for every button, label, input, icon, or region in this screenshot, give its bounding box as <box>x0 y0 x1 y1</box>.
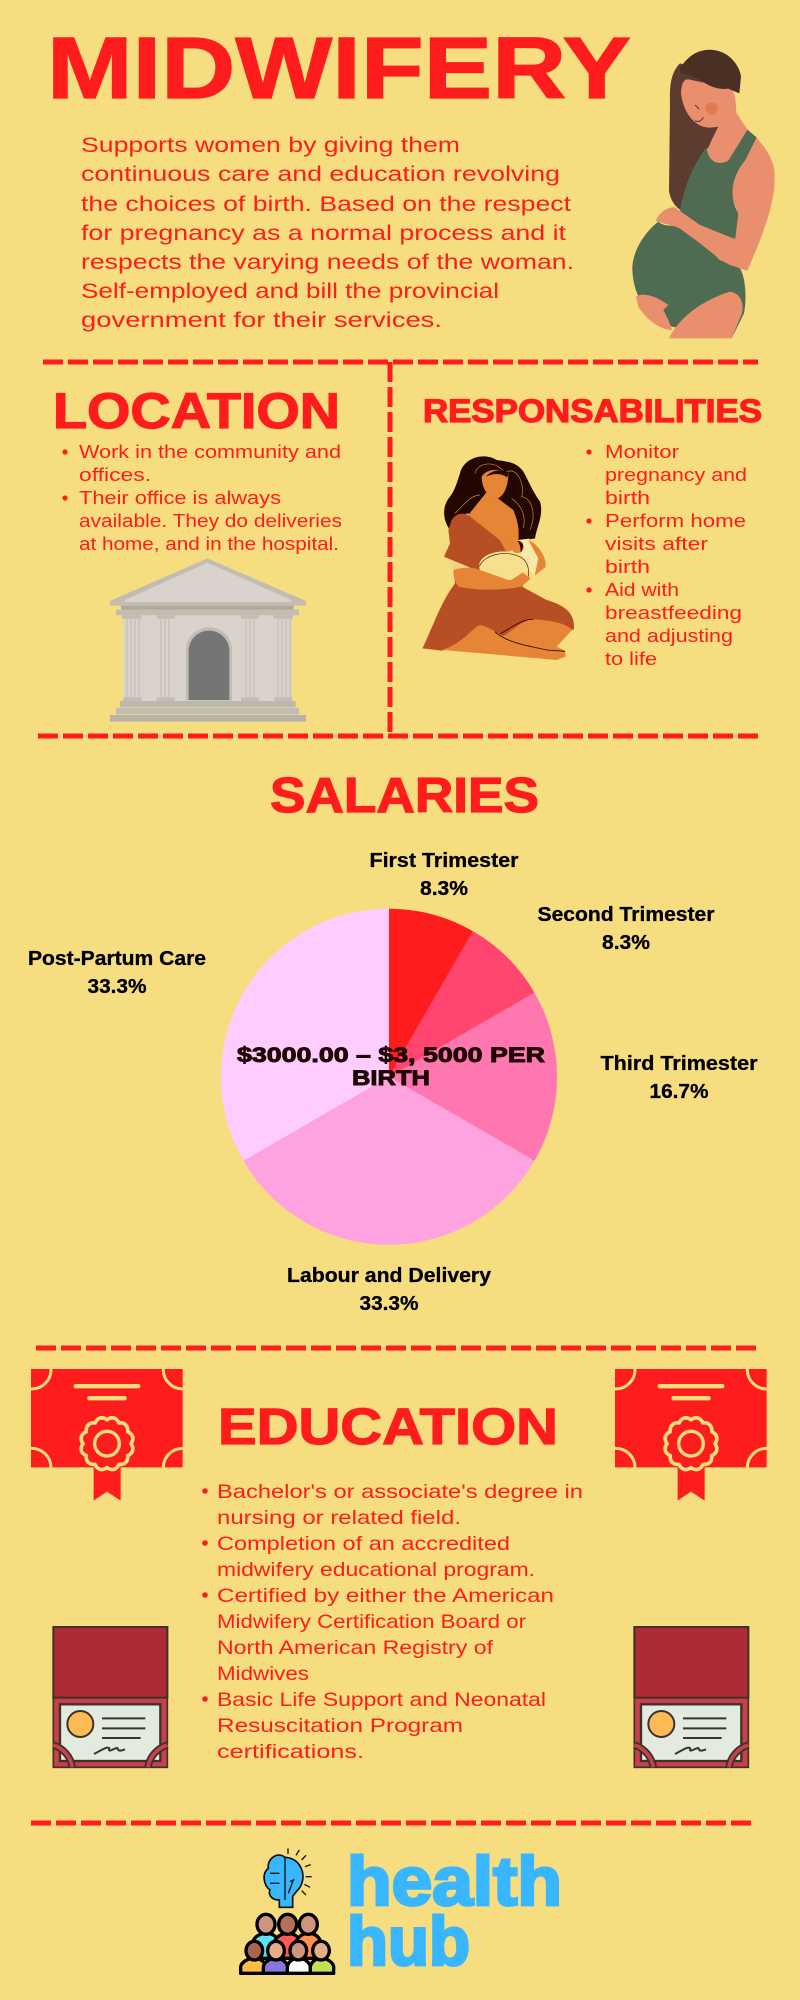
logo text: health hub: health <box>347 1843 562 1920</box>
logo text: health hub: hub <box>347 1903 470 1980</box>
intro text block: for pregnancy as a normal process and it <box>81 222 566 245</box>
pie label: third trimester: 16.7% <box>650 1081 709 1103</box>
responsabilities list: Monitor <box>605 442 679 462</box>
location list: available. They do deliveries <box>79 511 342 531</box>
icon: diploma folder left <box>53 1627 167 1767</box>
responsabilities list: to life <box>605 649 657 669</box>
pie label: first trimester: First Trimester <box>370 850 519 872</box>
responsabilities list: visits after <box>605 534 708 554</box>
intro text block: government for their services. <box>81 309 442 332</box>
pie label: post-partum care <box>28 948 206 998</box>
education list: North American Registry of <box>217 1637 494 1659</box>
icon: red certificate left <box>31 1369 183 1501</box>
pie label: third trimester: Third Trimester <box>600 1053 758 1075</box>
education list: nursing or related field. <box>217 1507 461 1529</box>
pie label: labour and delivery <box>287 1265 492 1315</box>
intro text block <box>81 134 574 332</box>
location list: offices. <box>79 465 151 485</box>
responsabilities list: Aid with <box>605 580 679 600</box>
education list: midwifery educational program. <box>217 1559 535 1581</box>
illustration: pregnant woman <box>632 50 775 338</box>
heading: responsabilities: RESPONSABILITIES <box>423 393 762 429</box>
location list: Work in the community and <box>79 442 341 462</box>
intro text block: Supports women by giving them <box>81 134 460 157</box>
responsabilities list <box>586 442 747 669</box>
location list <box>62 442 342 554</box>
pie label: post-partum care: 33.3% <box>88 976 147 998</box>
pie label: first trimester <box>370 850 519 900</box>
intro text block: continuous care and education revolving <box>81 163 560 186</box>
location list: at home, and in the hospital. <box>79 534 339 554</box>
responsabilities list: birth <box>605 488 650 508</box>
education list: Bachelor's or associate's degree in <box>217 1481 583 1503</box>
heading: salaries: SALARIES <box>270 769 539 823</box>
education list: Basic Life Support and Neonatal <box>217 1689 546 1711</box>
education list: Certified by either the American <box>217 1585 554 1607</box>
education list: Midwives <box>217 1663 309 1685</box>
education list: Midwifery Certification Board or <box>217 1611 527 1633</box>
education list: Completion of an accredited <box>217 1533 510 1555</box>
pie centre label <box>237 1044 545 1090</box>
responsabilities list: breastfeeding <box>605 603 742 623</box>
pie label: first trimester: 8.3% <box>420 878 468 900</box>
heading: education: EDUCATION <box>218 1398 558 1455</box>
pie centre label: $3000.00 – $3, 5000 PER <box>237 1044 545 1067</box>
pie label: second trimester <box>538 904 715 954</box>
intro text block: the choices of birth. Based on the respect <box>81 193 571 216</box>
pie label: labour and delivery: 33.3% <box>360 1293 419 1315</box>
intro text block: respects the varying needs of the woman. <box>81 251 574 274</box>
icon: diploma folder right <box>634 1627 748 1767</box>
pie label: second trimester: Second Trimester <box>538 904 715 926</box>
heading: location: LOCATION <box>53 383 340 439</box>
pie label: labour and delivery: Labour and Delivery <box>287 1265 492 1287</box>
icon: red certificate right <box>615 1369 767 1501</box>
responsabilities list: birth <box>605 557 650 577</box>
responsabilities list: pregnancy and <box>605 465 747 485</box>
education list: Resuscitation Program <box>217 1715 463 1737</box>
pie label: post-partum care: Post-Partum Care <box>28 948 206 970</box>
pie label: third trimester <box>600 1053 758 1103</box>
location list: Their office is always <box>79 488 281 508</box>
education list: certifications. <box>217 1741 364 1763</box>
pie centre label: BIRTH <box>352 1067 430 1090</box>
icon: building <box>110 558 306 722</box>
logo text: health hub <box>347 1843 562 1980</box>
responsabilities list: Perform home <box>605 511 746 531</box>
education list <box>202 1481 583 1763</box>
illustration: breastfeeding woman <box>422 456 574 660</box>
intro text block: Self-employed and bill the provincial <box>81 280 499 303</box>
title: MIDWIFERY <box>47 20 631 117</box>
pie chart <box>221 909 557 1245</box>
pie label: second trimester: 8.3% <box>602 932 650 954</box>
logo icon: brain bulb and people <box>241 1848 334 1973</box>
responsabilities list: and adjusting <box>605 626 733 646</box>
